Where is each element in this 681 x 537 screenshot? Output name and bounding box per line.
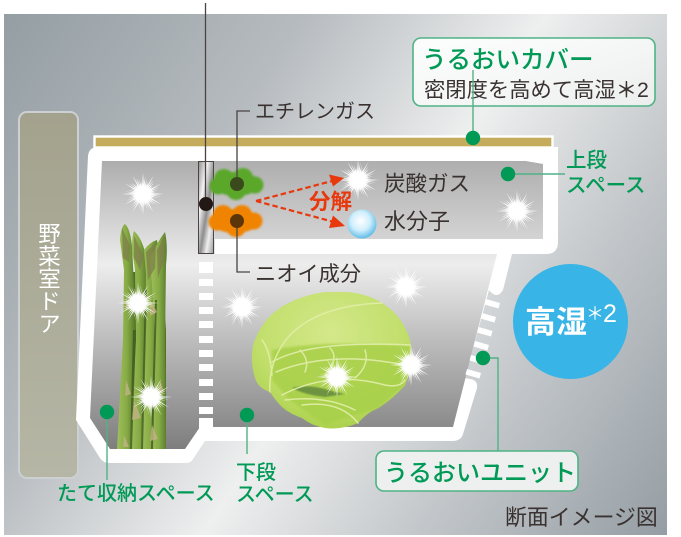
- decomposition arrows: [256, 180, 334, 222]
- vertical storage dot: [100, 405, 114, 419]
- lower space label: スペース: [236, 484, 314, 506]
- high humidity label: [525, 300, 617, 340]
- carbon dioxide label: 炭酸ガス: [384, 172, 470, 196]
- upper space label: 上段: [566, 149, 607, 172]
- ethylene label: エチレンガス: [255, 100, 375, 123]
- partition dashes between vertical and lower space: [199, 262, 213, 430]
- lower space leader: [246, 415, 248, 454]
- upper space label: [566, 149, 646, 197]
- water molecule label: 水分子: [384, 209, 450, 234]
- odor leader: [237, 221, 250, 272]
- asparagus bundle: [117, 224, 167, 449]
- callout title: うるおいカバー: [422, 47, 594, 74]
- inner compartment space: [90, 161, 543, 449]
- high humidity label: 2: [603, 300, 617, 328]
- upper dot: [501, 167, 515, 181]
- decomposition label: 分解: [309, 190, 352, 214]
- sparkles: [117, 159, 538, 418]
- odor component cloud: [208, 205, 262, 237]
- lower space label: 下段: [236, 461, 276, 484]
- cover dot: [466, 131, 480, 145]
- door label: 野菜室ドア: [36, 222, 61, 334]
- cabbage: [252, 292, 411, 428]
- callout body: 密閉度を高めて高湿＊2: [424, 78, 649, 102]
- ethylene dot: [230, 177, 244, 191]
- moisture unit dashes: [466, 299, 500, 378]
- upper space leader: [507, 173, 565, 175]
- filter dot: [199, 197, 213, 211]
- high humidity label: ＊: [586, 304, 604, 324]
- high humidity circle: [513, 264, 628, 379]
- upper space shading: [215, 161, 543, 239]
- moisture cover callout: [413, 38, 655, 106]
- arrow heads: [329, 174, 345, 228]
- moisture unit callout: うるおいユニット: [384, 460, 576, 487]
- lower space label: [236, 461, 314, 506]
- moisture unit dot: [476, 351, 490, 365]
- ethylene gas cloud: [210, 168, 264, 200]
- vertical storage label: たて収納スペース: [57, 482, 215, 505]
- high humidity label: 高湿: [525, 305, 587, 340]
- cross-section caption: 断面イメージ図: [505, 505, 658, 530]
- upper space label: スペース: [566, 174, 646, 197]
- water molecule sphere: [348, 210, 376, 238]
- cover leader: [472, 70, 474, 138]
- odor dot: [230, 214, 244, 228]
- moisture cover top plate: [94, 136, 552, 148]
- ethylene leader: [237, 111, 250, 184]
- filter unit box: [198, 162, 214, 254]
- white compartment body: [76, 147, 558, 463]
- odor label: ニオイ成分: [255, 262, 361, 286]
- vegetable compartment door: [19, 112, 78, 478]
- leader line to filter: [204, 3, 206, 204]
- moisture unit callout: [376, 451, 578, 491]
- moisture unit leader: [483, 358, 498, 451]
- vertical storage leader: [106, 412, 108, 480]
- lower space dot: [240, 408, 254, 422]
